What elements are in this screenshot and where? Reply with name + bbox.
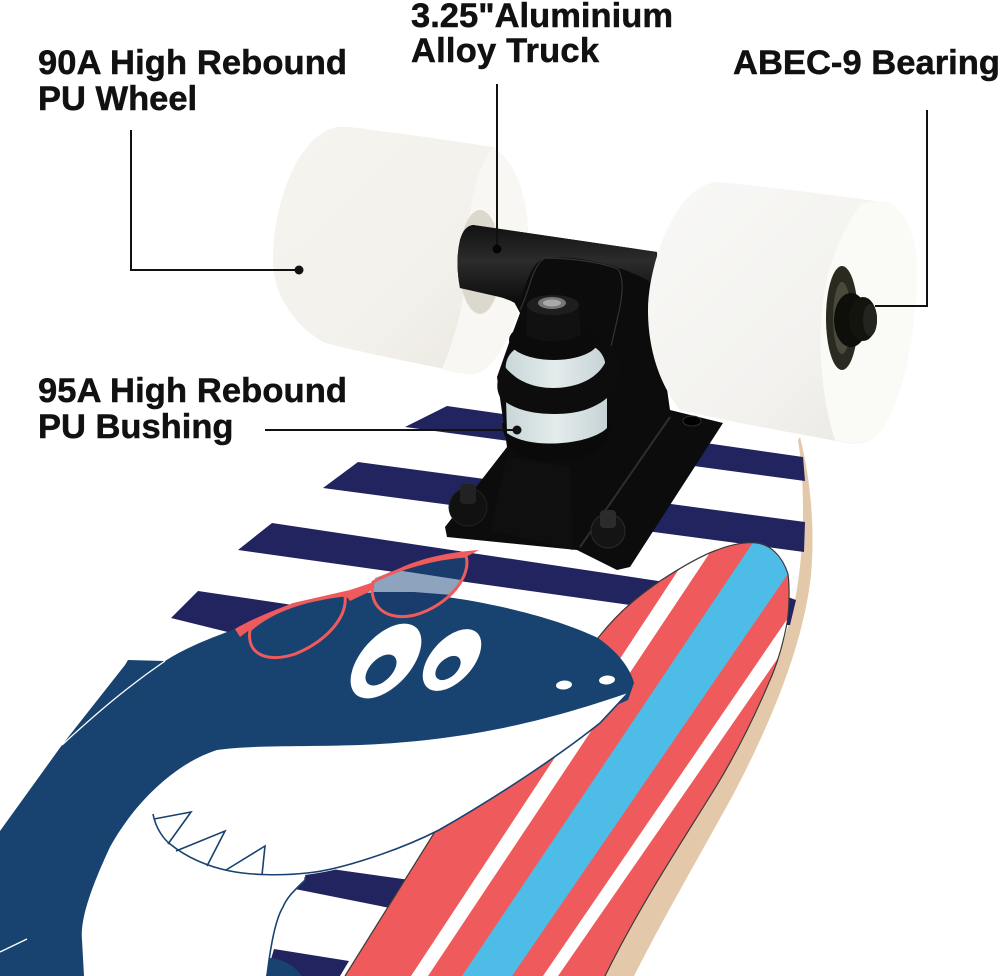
axle [458, 225, 657, 305]
label: bushing: 95A High Rebound [38, 372, 347, 410]
left eye [337, 611, 435, 711]
wheel outer face [821, 201, 917, 443]
belly blue patch [266, 958, 302, 976]
cradle [497, 345, 620, 414]
lower washer [502, 423, 612, 462]
leader: wheel [131, 130, 304, 274]
left wheel [273, 127, 528, 374]
fin highlight [62, 661, 165, 745]
right bolt [591, 510, 625, 548]
deck navy stripes [171, 406, 805, 976]
baseplate rib [580, 417, 670, 547]
truck silhouette: hanger and baseplate [445, 225, 723, 570]
nostrils [556, 675, 615, 690]
baseplate hole [683, 416, 701, 426]
top washer [509, 320, 599, 360]
wheel hub recess [459, 210, 501, 314]
bearing [826, 266, 858, 370]
hanger highlights [520, 258, 622, 372]
label: wheel [38, 44, 347, 118]
surfboard [345, 535, 792, 976]
label: truck: Alloy Truck [411, 32, 600, 70]
axle nut [834, 293, 877, 347]
baseplate front [490, 457, 573, 550]
label: bearing: ABEC-9 Bearing [733, 44, 1000, 82]
lower bushing [506, 398, 607, 444]
shark [0, 550, 634, 976]
label: bushing: PU Bushing [38, 408, 234, 446]
leader: bearing [875, 110, 927, 306]
leader: truck [492, 84, 502, 254]
right wheel [648, 182, 917, 443]
upper bushing [506, 345, 606, 400]
truck [445, 225, 723, 570]
label: truck [411, 0, 673, 70]
right eye [412, 618, 492, 702]
label: wheel: 90A High Rebound [38, 44, 347, 82]
leader: bushing [265, 426, 522, 434]
shark body [0, 592, 634, 976]
label: bushing [38, 372, 347, 446]
sunglasses [235, 550, 479, 658]
board: wood edge [600, 437, 813, 976]
label: wheel: PU Wheel [38, 80, 197, 118]
left bolt [449, 484, 487, 526]
shark mouth line and teeth [153, 693, 628, 976]
shark belly and jaw [82, 693, 628, 976]
tail highlight [0, 939, 27, 952]
kingpin nut [526, 295, 581, 342]
wheel face [442, 147, 528, 374]
